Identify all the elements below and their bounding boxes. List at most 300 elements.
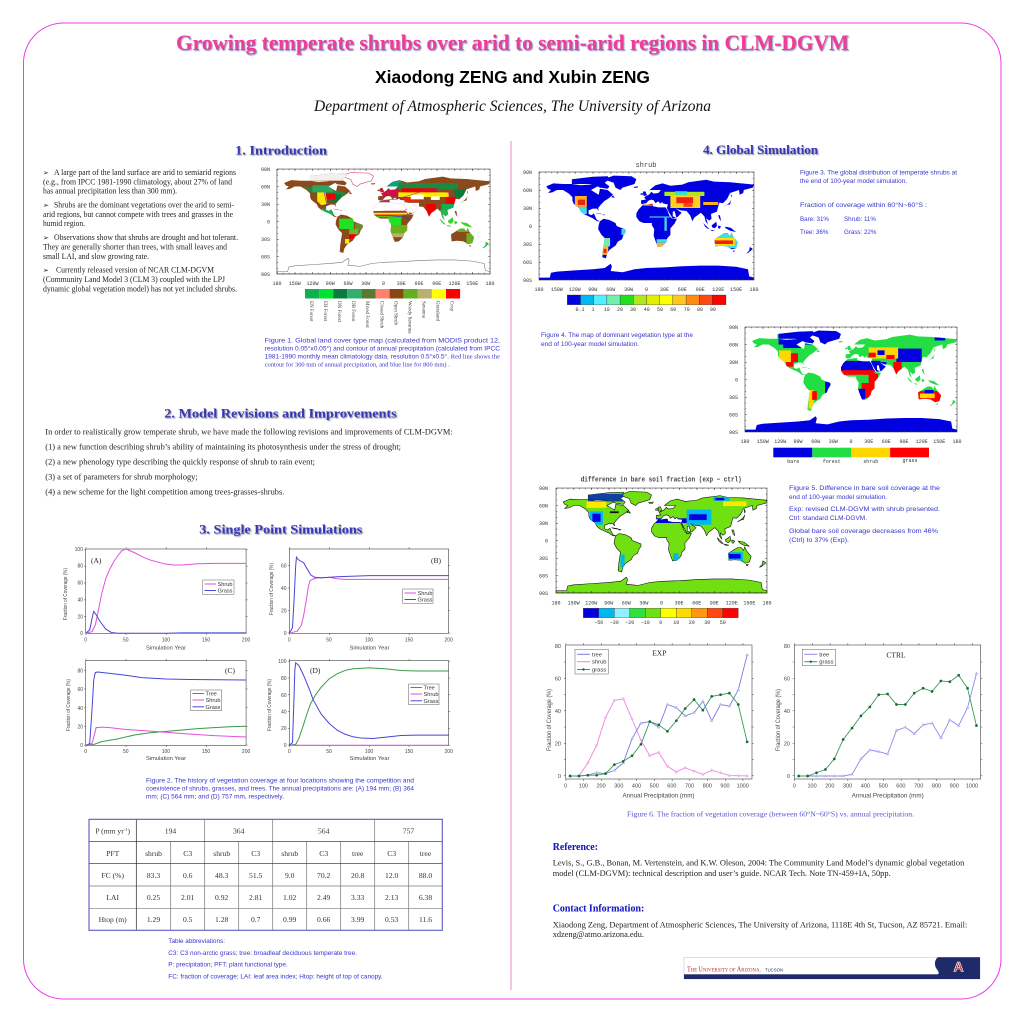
line chart C: 0 xyxy=(84,749,87,755)
data table: 0.6 xyxy=(183,871,193,880)
data table: 564 xyxy=(318,826,330,835)
map: global land cover type (figure 1): 180 xyxy=(485,281,495,287)
map: global land cover type (figure 1): 120E xyxy=(448,281,461,287)
text block: introduction bullets: Currently released version of NCAR CLM-DGVM xyxy=(56,265,214,274)
map: difference in bare soil fraction (figure 5): 90E xyxy=(710,600,719,606)
line chart: CTRL coverage vs precipitation: 0 xyxy=(787,774,790,780)
line chart D: 50 xyxy=(326,749,332,755)
map: dominant vegetation type (figure 4): 120E xyxy=(916,439,928,445)
title: Growing temperate shrubs over arid to semi-arid regions in CLM-DGVM xyxy=(176,30,849,55)
line chart: CTRL coverage vs precipitation: tree xyxy=(819,652,829,658)
data table: 1.28 xyxy=(215,915,229,924)
line chart: EXP coverage vs precipitation: 500 xyxy=(650,784,659,790)
map: shrub coverage (figure 3): 180 xyxy=(534,287,544,293)
map: shrub coverage (figure 3): 30E xyxy=(660,287,669,293)
map: shrub coverage (figure 3): 30N xyxy=(523,206,532,212)
line chart B: 0 xyxy=(284,631,287,637)
map: difference in bare soil fraction (figure 5): 50 xyxy=(720,620,726,626)
heading: model revisions: 2. Model Revisions and Improvements xyxy=(164,406,397,421)
map: global land cover type (figure 1): 60E xyxy=(414,281,424,287)
data table: 0.5 xyxy=(183,915,193,924)
map: shrub coverage (figure 3): 90S xyxy=(523,278,532,284)
heading: contact information: Contact Information: xyxy=(553,903,644,914)
map: global land cover type (figure 1): DB Forest xyxy=(350,301,355,322)
data table: C3 xyxy=(387,849,396,858)
affiliation: Department of Atmospheric Sciences, The University of Arizona xyxy=(313,98,711,115)
caption: figure 5: Exp: revised CLM-DGVM with shrub presented. xyxy=(789,506,940,513)
data table: 0.92 xyxy=(215,893,229,902)
data table: 83.3 xyxy=(147,871,160,880)
map: difference in bare soil fraction (figure 5): 60N xyxy=(539,504,548,510)
data table: ) xyxy=(128,826,131,835)
data table: 11.6 xyxy=(419,915,432,924)
data table: 0.53 xyxy=(385,915,399,924)
line chart C xyxy=(66,660,250,762)
line chart C: 60 xyxy=(77,687,83,693)
map: dominant vegetation type (figure 4): bare xyxy=(787,459,799,465)
data table: 6.38 xyxy=(419,893,432,902)
text block: contact: xdzeng@atmo.arizona.edu. xyxy=(553,929,644,939)
map: difference in bare soil fraction (figure 5): 120E xyxy=(726,600,738,606)
map: difference in bare soil fraction (figure 5): 20 xyxy=(689,620,695,626)
line chart B: 20 xyxy=(281,608,287,614)
line chart: EXP coverage vs precipitation: Fraction of Coverage (%) xyxy=(547,689,553,751)
data table: 3.99 xyxy=(351,915,365,924)
map: difference in bare soil fraction (figure 5): −50 xyxy=(594,620,603,626)
text block: model revisions list: (2) a new phenology type describing the quickly response of shrub to rain event; xyxy=(45,456,315,466)
map: shrub coverage (figure 3): 90E xyxy=(696,287,705,293)
line chart: EXP coverage vs precipitation: 100 xyxy=(579,784,588,790)
line chart A: Fraction of Coverage (%) xyxy=(63,568,69,620)
caption: figure 2: coexistence of shrubs, grasses, and trees. The annual precipitations are: (A) 194 mm; (B) 364 xyxy=(146,786,415,792)
caption: figure 4 xyxy=(541,332,694,348)
line chart B xyxy=(269,548,453,652)
line chart A: 50 xyxy=(123,638,129,644)
data table: LAI xyxy=(106,893,119,902)
map: difference in bare soil fraction (figure 5): 0 xyxy=(545,538,548,544)
line chart A: 100 xyxy=(162,638,170,644)
line chart: EXP coverage vs precipitation: EXP xyxy=(652,649,666,658)
text block: introduction bullets: Observations show that shrubs are drought and hot tolerant. xyxy=(54,233,238,242)
map: difference in bare soil fraction (figure 5): 30S xyxy=(539,556,548,562)
map: global land cover type (figure 1): 30S xyxy=(261,237,270,243)
text block: introduction bullets: Shrubs are the dominant vegetations over the arid to semi- xyxy=(54,201,234,210)
line chart D: 200 xyxy=(445,749,453,755)
line chart: EXP coverage vs precipitation: grass xyxy=(592,668,606,674)
table abbreviations note: P: precipitation; PFT: plant functional type. xyxy=(168,962,288,969)
map: difference in bare soil fraction (figure 5): 90N xyxy=(539,486,548,492)
map: shrub coverage (figure 3): 20 xyxy=(617,307,623,313)
line chart B: 60 xyxy=(281,564,287,570)
map: global land cover type (figure 1): EB Forest xyxy=(322,301,327,322)
line chart: EXP coverage vs precipitation: tree xyxy=(592,652,602,658)
map: shrub coverage (figure 3): 30 xyxy=(630,307,636,313)
line chart D: 20 xyxy=(281,726,287,732)
line chart A: 40 xyxy=(77,597,83,603)
map: shrub coverage (figure 3): shrub xyxy=(635,162,657,170)
text block: model revisions list xyxy=(45,426,453,497)
map: global land cover type (figure 1): Mixed Forest xyxy=(364,301,369,328)
data table: tree xyxy=(352,849,364,858)
line chart: EXP coverage vs precipitation: 0 xyxy=(558,774,561,780)
text block: reference: model (CLM-DGVM): technical description and user’s guide. NCAR Tech. Note TN-459+IA, 50pp. xyxy=(553,868,891,878)
data table: 0.99 xyxy=(283,915,297,924)
line chart: EXP coverage vs precipitation: Annual Precipitation (mm) xyxy=(622,794,694,800)
text block: introduction bullets: ➢ xyxy=(43,202,49,210)
text block: introduction bullets: has annual precipitation less than 300 mm). xyxy=(43,187,177,196)
map: difference in bare soil fraction (figure 5): difference in bare soil fraction (exp − ctrl) xyxy=(581,477,742,485)
map: shrub coverage (figure 3): 1 xyxy=(591,307,595,313)
map: global land cover type (figure 1): 90E xyxy=(432,281,441,287)
line chart: CTRL coverage vs precipitation: Annual Precipitation (mm) xyxy=(852,794,924,800)
line chart D: 100 xyxy=(278,659,287,665)
text block: introduction bullets: A large part of the land surface are arid to semiarid regions xyxy=(54,168,236,177)
line chart C: 200 xyxy=(242,749,250,755)
data table: 88.0 xyxy=(419,871,432,880)
line chart C: 100 xyxy=(162,749,170,755)
map: global land cover type (figure 1): 150W xyxy=(289,281,301,287)
caption: figure 2: mm; (C) 564 mm; and (D) 757 mm, respectively. xyxy=(146,794,284,800)
caption: figure 5: Global bare soil coverage decreases from 46% xyxy=(789,528,939,535)
map: shrub coverage (figure 3): 60 xyxy=(670,307,676,313)
data table: C3 xyxy=(319,849,328,858)
line chart: CTRL coverage vs precipitation: 600 xyxy=(896,784,905,790)
map: shrub coverage (figure 3): 180 xyxy=(749,287,759,293)
map: shrub coverage (figure 3): 0.1 xyxy=(575,307,585,313)
line chart: CTRL coverage vs precipitation xyxy=(776,644,981,800)
map: difference in bare soil fraction (figure 5): 0 xyxy=(660,600,663,606)
line chart C: 40 xyxy=(77,706,83,712)
text block: model revisions list: In order to realistically grow temperate shrub, we have made the following revisions and improvements of CLM-DGVM: xyxy=(45,426,453,436)
map: shrub coverage (figure 3): 150W xyxy=(551,287,563,293)
line chart D: Grass xyxy=(424,699,439,705)
authors: Xiaodong ZENG and Xubin ZENG xyxy=(375,67,650,87)
caption: figure 5: Ctrl: standard CLM-DGVM. xyxy=(789,515,867,522)
caption: figure 5: Figure 5. Difference in bare soil coverage at the xyxy=(789,485,941,492)
line chart A: 200 xyxy=(242,638,250,644)
line chart: CTRL coverage vs precipitation: Fraction of Coverage (%) xyxy=(776,689,782,751)
map: global land cover type (figure 1): 30E xyxy=(397,281,406,287)
text block: introduction bullets: small LAI, and slow growing rate. xyxy=(43,252,149,261)
line chart C: Shrub xyxy=(206,698,220,704)
map: dominant vegetation type (figure 4): 30S xyxy=(729,395,738,401)
map: global land cover type (figure 1): Open Shrub xyxy=(392,301,398,326)
data table: 0.66 xyxy=(317,915,331,924)
map: global land cover type (figure 1): 150E xyxy=(466,281,478,287)
data table: 0.25 xyxy=(147,893,160,902)
line chart D: 40 xyxy=(281,710,287,716)
line chart: EXP coverage vs precipitation: 800 xyxy=(703,784,712,790)
caption: figure 3 and coverage fractions xyxy=(800,170,957,236)
map: dominant vegetation type (figure 4): 150E xyxy=(933,439,945,445)
map: global land cover type (figure 1): 0 xyxy=(382,281,385,287)
map: global land cover type (figure 1): 60S xyxy=(261,254,270,260)
map: dominant vegetation type (figure 4): 60N xyxy=(729,342,738,348)
map: dominant vegetation type (figure 4): 0 xyxy=(849,439,853,445)
text block: introduction bullets: humid region. xyxy=(43,219,85,228)
map: difference in bare soil fraction (figure 5) xyxy=(539,477,772,626)
data table: PFT xyxy=(106,849,120,858)
map: global land cover type (figure 1): 60N xyxy=(261,184,270,190)
line chart: EXP coverage vs precipitation: 60 xyxy=(555,676,561,682)
data table: 2.01 xyxy=(181,893,195,902)
text block: introduction bullets: ➢ xyxy=(43,169,49,177)
logo: University of Arizona banner: TUCSON xyxy=(765,968,783,973)
caption: figure 4: end of 100-year model simulation. xyxy=(541,341,639,348)
data table: 20.8 xyxy=(351,871,365,880)
line chart: CTRL coverage vs precipitation: 400 xyxy=(861,784,870,790)
map: dominant vegetation type (figure 4): 30W xyxy=(829,439,838,445)
line chart B: 150 xyxy=(405,638,413,644)
caption: figure 2: Figure 2. The history of vegetation coverage at four locations showing the competition and xyxy=(146,778,415,784)
map: difference in bare soil fraction (figure 5): 90W xyxy=(604,600,613,606)
data table: tree xyxy=(420,849,432,858)
line chart: EXP coverage vs precipitation: 900 xyxy=(720,784,730,790)
data table: 9.0 xyxy=(285,871,295,880)
line chart C: (C) xyxy=(225,666,236,675)
line chart C: 20 xyxy=(77,725,83,731)
logo: University of Arizona banner: A xyxy=(953,958,964,974)
data table: FC (%) xyxy=(101,871,124,880)
text block: model revisions list: (4) a new scheme for the light competition among trees-grasses-shrubs. xyxy=(45,487,284,497)
line chart D: Simulation Year xyxy=(350,756,390,762)
line chart: CTRL coverage vs precipitation: 800 xyxy=(932,784,941,790)
caption: figure 3 and coverage fractions: the end of 100-year model simulation. xyxy=(800,178,907,185)
line chart D: 0 xyxy=(284,743,287,749)
map: shrub coverage (figure 3): 0 xyxy=(529,224,532,230)
data table: 1.29 xyxy=(147,915,160,924)
map: shrub coverage (figure 3): 90N xyxy=(523,170,532,176)
map: difference in bare soil fraction (figure 5): 60S xyxy=(539,574,548,580)
line chart: CTRL coverage vs precipitation: 500 xyxy=(879,784,888,790)
map: global land cover type (figure 1): Crop xyxy=(448,301,454,312)
line chart: CTRL coverage vs precipitation: 0 xyxy=(793,784,796,790)
line chart C: Simulation Year xyxy=(146,756,186,762)
table abbreviations note: Table abbreviations: xyxy=(168,938,225,945)
map: global land cover type (figure 1): 30N xyxy=(261,202,270,208)
line chart D: (D) xyxy=(310,666,321,675)
logo: University of Arizona banner: THE UNIVERSITY OF ARIZONA, xyxy=(687,966,761,974)
caption: figure 2 xyxy=(146,778,415,800)
map: global land cover type (figure 1): Savanna xyxy=(420,301,426,319)
line chart D xyxy=(267,659,453,762)
line chart A: 80 xyxy=(77,564,83,570)
caption: figure 1: Figure 1. Global land cover type map (calculated from MODIS product 12, xyxy=(265,337,500,344)
line chart: EXP coverage vs precipitation: 600 xyxy=(667,784,676,790)
data table: shrub xyxy=(145,849,162,858)
map: shrub coverage (figure 3): 60W xyxy=(606,287,615,293)
map: shrub coverage (figure 3): 0 xyxy=(645,287,648,293)
map: difference in bare soil fraction (figure 5): 120W xyxy=(585,600,597,606)
data table: P (mm yr xyxy=(95,826,124,835)
map: difference in bare soil fraction (figure 5): 150W xyxy=(568,600,580,606)
line chart C: 50 xyxy=(123,749,129,755)
line chart D: Fraction of Coverage (%) xyxy=(267,679,273,731)
text block: reference: Levis, S., G.B., Bonan, M. Vertenstein, and K.W. Oleson, 2004: The Community Land Model’s dynamic global vegetation xyxy=(553,858,965,868)
data table: 364 xyxy=(233,826,245,835)
map: global land cover type (figure 1): Closed Shrub xyxy=(378,301,384,329)
line chart A: 60 xyxy=(77,580,83,586)
map: dominant vegetation type (figure 4): 30N xyxy=(729,360,738,366)
line chart: EXP coverage vs precipitation: 200 xyxy=(597,784,606,790)
data table: 48.3 xyxy=(215,871,229,880)
data table: 2.13 xyxy=(385,893,399,902)
map: global land cover type (figure 1): EN Forest xyxy=(308,301,313,322)
text block: model revisions list: (1) a new function describing shrub’s ability of maintaining its photosynthesis under the stress of drought; xyxy=(45,441,401,451)
map: global land cover type (figure 1) xyxy=(261,167,495,334)
map: shrub coverage (figure 3): 90W xyxy=(588,287,597,293)
caption: figure 3 and coverage fractions: Grass: 22% xyxy=(844,229,877,236)
line chart D: 150 xyxy=(405,749,413,755)
line chart A: 150 xyxy=(202,638,210,644)
map: shrub coverage (figure 3): 10 xyxy=(604,307,610,313)
data table: 0.7 xyxy=(251,915,261,924)
map: shrub coverage (figure 3): 30S xyxy=(523,242,532,248)
caption: figure 5: end of 100-year model simulation. xyxy=(789,494,887,501)
line chart: CTRL coverage vs precipitation: 100 xyxy=(808,784,817,790)
line chart D: 80 xyxy=(281,676,287,682)
line chart: CTRL coverage vs precipitation: 80 xyxy=(784,644,790,650)
map: global land cover type (figure 1): 90W xyxy=(326,281,335,287)
line chart: EXP coverage vs precipitation: 20 xyxy=(555,742,561,748)
line chart A: 20 xyxy=(77,614,83,620)
map: global land cover type (figure 1): DN Forest xyxy=(336,301,341,323)
line chart B: Shrub xyxy=(418,591,432,597)
map: dominant vegetation type (figure 4): 90S xyxy=(729,430,738,436)
line chart A: 0 xyxy=(80,631,83,637)
map: shrub coverage (figure 3): 60N xyxy=(523,188,532,194)
line chart C: 150 xyxy=(202,749,210,755)
caption: figure 1: resolution 0.05°x0.05°) and contour of annual precipitation (calculated from IPCC xyxy=(265,345,501,352)
map: global land cover type (figure 1): Woody Savanna xyxy=(406,301,412,334)
text block: introduction bullets xyxy=(43,168,238,294)
line chart: EXP coverage vs precipitation: 300 xyxy=(614,784,623,790)
text block: introduction bullets: arid regions, but cannot compete with trees and grasses in the xyxy=(43,210,233,219)
line chart A: 100 xyxy=(75,547,83,553)
text block: introduction bullets: (Community Land Model 3 (CLM 3) coupled with the LPJ xyxy=(43,275,225,284)
map: difference in bare soil fraction (figure 5): −30 xyxy=(610,620,619,626)
map: difference in bare soil fraction (figure 5): 180 xyxy=(551,600,561,606)
line chart: EXP coverage vs precipitation: 80 xyxy=(555,644,561,650)
map: shrub coverage (figure 3): 150E xyxy=(730,287,742,293)
caption: figure 6: Figure 6. The fraction of vegetation coverage (between 60°N~60°S) vs. annual precipitation. xyxy=(627,810,914,819)
line chart: CTRL coverage vs precipitation: 40 xyxy=(784,709,790,715)
map: dominant vegetation type (figure 4): grass xyxy=(902,458,918,464)
map: shrub coverage (figure 3): 60E xyxy=(678,287,687,293)
map: difference in bare soil fraction (figure 5): 60W xyxy=(622,600,631,606)
map: dominant vegetation type (figure 4): 120W xyxy=(774,439,786,445)
data table: 12.0 xyxy=(385,871,399,880)
line chart: EXP coverage vs precipitation: shrub xyxy=(592,660,607,666)
caption: figure 1 xyxy=(265,337,501,368)
map: difference in bare soil fraction (figure 5): 30E xyxy=(675,600,684,606)
map: difference in bare soil fraction (figure 5): 60E xyxy=(692,600,701,606)
line chart A: Grass xyxy=(218,588,233,594)
data table xyxy=(89,819,442,930)
map: global land cover type (figure 1): 30W xyxy=(361,281,370,287)
line chart C: Fraction of Coverage (%) xyxy=(66,679,72,731)
map: global land cover type (figure 1): 90N xyxy=(261,167,270,173)
map: shrub coverage (figure 3): 90 xyxy=(710,307,716,313)
map: shrub coverage (figure 3): 50 xyxy=(657,307,663,313)
map: dominant vegetation type (figure 4): 150W xyxy=(757,439,769,445)
line chart: EXP coverage vs precipitation: 400 xyxy=(632,784,641,790)
map: dominant vegetation type (figure 4): 180 xyxy=(952,439,962,445)
line chart B: 40 xyxy=(281,586,287,592)
map: difference in bare soil fraction (figure 5): 30 xyxy=(704,620,710,626)
map: dominant vegetation type (figure 4) xyxy=(729,325,962,465)
data table: shrub xyxy=(281,849,298,858)
line chart B: (B) xyxy=(431,556,442,565)
map: dominant vegetation type (figure 4): 180 xyxy=(740,439,750,445)
map: difference in bare soil fraction (figure 5): 150E xyxy=(743,600,755,606)
data table: 2.49 xyxy=(317,893,331,902)
line chart: EXP coverage vs precipitation: 700 xyxy=(685,784,694,790)
table abbreviations note: C3: C3 non-arctic grass; tree: broadleaf deciduous temperate tree. xyxy=(168,950,357,957)
line chart D: Shrub xyxy=(424,692,438,698)
map: shrub coverage (figure 3): 70 xyxy=(684,307,690,313)
map: difference in bare soil fraction (figure 5): 180 xyxy=(762,600,772,606)
caption: figure 3 and coverage fractions: Bare: 31% xyxy=(800,216,829,223)
caption: figure 1: contour for 300 mm of annual precipitation, and blue line for 800 mm) . xyxy=(265,361,450,368)
line chart D: 100 xyxy=(365,749,373,755)
heading: introduction: 1. Introduction xyxy=(235,142,328,158)
map: shrub coverage (figure 3): 30W xyxy=(624,287,633,293)
line chart: CTRL coverage vs precipitation: 20 xyxy=(784,742,790,748)
map: difference in bare soil fraction (figure 5): 10 xyxy=(673,620,679,626)
line chart: EXP coverage vs precipitation: 0 xyxy=(564,784,567,790)
logo: University of Arizona banner xyxy=(684,957,980,979)
line chart: CTRL coverage vs precipitation: 1000 xyxy=(966,784,978,790)
map: dominant vegetation type (figure 4): 30E xyxy=(864,439,873,445)
line chart A xyxy=(63,547,250,652)
map: dominant vegetation type (figure 4): 90W xyxy=(793,439,803,445)
map: global land cover type (figure 1): 60W xyxy=(343,281,353,287)
line chart: CTRL coverage vs precipitation: 200 xyxy=(825,784,834,790)
line chart B: 50 xyxy=(326,638,332,644)
line chart B: Fraction of Coverage (%) xyxy=(269,563,275,615)
line chart B: 200 xyxy=(445,638,453,644)
map: difference in bare soil fraction (figure 5): 30W xyxy=(639,600,648,606)
map: difference in bare soil fraction (figure 5): −10 xyxy=(641,620,650,626)
data table: 70.2 xyxy=(317,871,331,880)
map: difference in bare soil fraction (figure 5): 0 xyxy=(659,620,662,626)
data table: C3 xyxy=(251,849,260,858)
data table: 2.81 xyxy=(249,893,263,902)
map: dominant vegetation type (figure 4): 60E xyxy=(882,439,891,445)
line chart D: 60 xyxy=(281,693,287,699)
line chart B: Simulation Year xyxy=(350,646,390,652)
map: dominant vegetation type (figure 4): 60W xyxy=(811,439,820,445)
line chart A: Simulation Year xyxy=(146,646,186,652)
line chart: CTRL coverage vs precipitation: 900 xyxy=(950,784,959,790)
data table: Htop (m) xyxy=(99,915,127,924)
text block: introduction bullets: ➢ xyxy=(43,266,49,274)
data table: 757 xyxy=(403,826,414,835)
line chart: EXP coverage vs precipitation: 40 xyxy=(555,709,561,715)
line chart D: Tree xyxy=(424,686,435,692)
map: global land cover type (figure 1): 0 xyxy=(267,220,270,226)
data table: 51.5 xyxy=(249,871,263,880)
map: global land cover type (figure 1): 180 xyxy=(272,281,282,287)
data table: 1.02 xyxy=(283,893,297,902)
line chart D: 0 xyxy=(288,749,291,755)
caption: figure 5: (Ctrl) to 37% (Exp). xyxy=(789,537,849,544)
map: global land cover type (figure 1): 90S xyxy=(261,272,270,278)
line chart A: (A) xyxy=(91,556,102,565)
map: shrub coverage (figure 3): 120W xyxy=(569,287,581,293)
map: shrub coverage (figure 3): 120E xyxy=(712,287,724,293)
